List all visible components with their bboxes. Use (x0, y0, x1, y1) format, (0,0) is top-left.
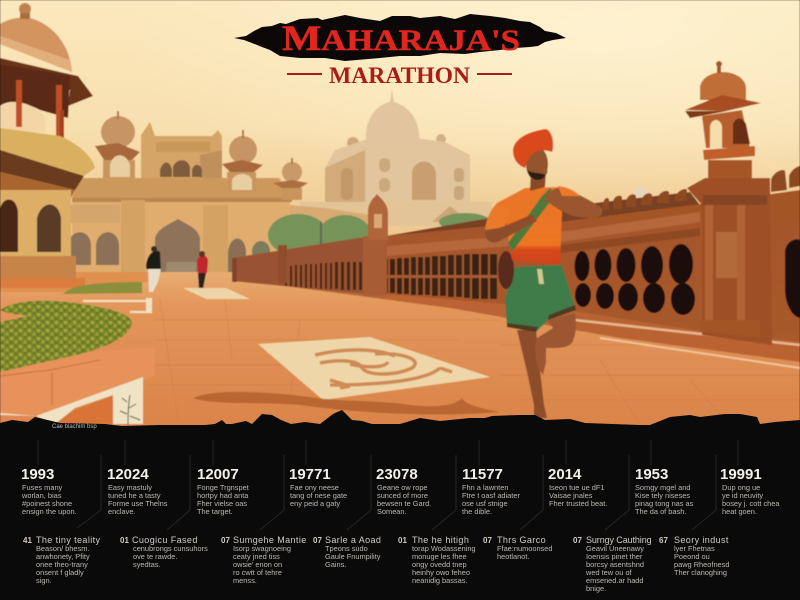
item 8: pawg Rheofnesd (674, 560, 729, 569)
ground paving (0, 272, 800, 427)
item 2: cenubrongs cunsuhors (133, 544, 208, 553)
ground swirl mosaic (258, 337, 490, 400)
entry 12007 (197, 466, 249, 516)
small openings far section (383, 254, 497, 299)
crenellated top (386, 166, 800, 242)
entry 2014: Iseon tue ue dF1 (549, 483, 604, 492)
item 4: Gaule Fnumpility (325, 552, 381, 561)
pilasters (121, 200, 228, 275)
entry 19771 (289, 466, 347, 508)
small tower on wall (368, 194, 388, 240)
entry 12024: enclave. (108, 507, 136, 516)
weed plant (120, 395, 140, 425)
entry 11577: Fhn a lawnten (462, 483, 508, 492)
connector lines (38, 440, 738, 530)
sky (0, 0, 800, 290)
item 5: heinhy owo feheo (412, 568, 470, 577)
back tower block (141, 122, 222, 180)
timeline lower row (23, 535, 729, 593)
small caption: Cae blachim bsp (52, 424, 97, 430)
columns (16, 80, 22, 127)
entry 23078: sunced of more (377, 491, 428, 500)
turban (513, 129, 553, 168)
entry 2014: 2014 (548, 466, 582, 483)
entry 19991: ye id neuvity (722, 491, 763, 500)
entry 12007: Fher vielse oas (197, 499, 247, 508)
title banner (234, 14, 566, 88)
item 1: Beason/ bhesm. (36, 544, 89, 553)
item 1: onsent f gladly (36, 568, 84, 577)
balcony (0, 128, 95, 176)
trees in front of the palace (268, 213, 491, 256)
item 3: ro cwtt of tehre (233, 568, 282, 577)
item 8 (659, 535, 729, 577)
item 3: ceaty jned tiss (233, 552, 280, 561)
left arm (485, 203, 510, 232)
item 1: onee theo-trany (36, 560, 88, 569)
entry 11577: the dible. (462, 507, 492, 516)
gate arch (155, 219, 200, 278)
distant Taj Mahal style palace (300, 90, 650, 226)
entry 12007: The target. (197, 507, 233, 516)
green hedge and lawn (0, 282, 142, 372)
entry 11577: Ftre t oasf adiater (462, 491, 520, 500)
background scene (0, 0, 800, 427)
item 5: The he hitigh (412, 535, 469, 545)
pillars (232, 258, 237, 282)
item 2: 01 (120, 536, 129, 545)
wall section near (232, 237, 365, 294)
entry 23078: Somean. (377, 507, 407, 516)
item 7: 07 (573, 536, 582, 545)
distant runners (146, 246, 208, 292)
item 5: neanidig bassas. (412, 576, 467, 585)
entry 1953: Somgy mgel and (635, 483, 690, 492)
right wall with balustrade (232, 166, 800, 345)
entry 1993: #poinest shone (22, 499, 72, 508)
item 8: 67 (659, 536, 668, 545)
plinth (0, 256, 76, 278)
item 3: menss. (233, 576, 257, 585)
item 2 (120, 535, 208, 569)
large openings (574, 239, 800, 318)
ground shadow (193, 392, 500, 414)
dome middle (229, 136, 257, 164)
entry 12024: 12024 (107, 466, 149, 483)
lamp post (320, 222, 322, 248)
subtitle rule right (477, 73, 512, 75)
entry 19991 (720, 466, 780, 516)
waist pouch (498, 251, 514, 289)
item 2: Cuogicu Fased (132, 535, 198, 545)
shorts (505, 265, 576, 332)
big pier (687, 178, 772, 345)
entry 1953: 1953 (635, 466, 668, 483)
entry 1953: pinag tong nas as (635, 499, 694, 508)
entry 19771: eny peid a gaty (290, 499, 340, 508)
item 6: heotlanot. (497, 552, 529, 561)
item 6 (483, 535, 552, 561)
entry 1953 (635, 466, 694, 516)
item 7: emsened.ar hadd (586, 576, 644, 585)
item 3: 07 (221, 536, 230, 545)
item 1: 41 (23, 536, 32, 545)
timeline text wrapper (21, 466, 780, 593)
item 8: lyer Fhetnas (674, 544, 715, 553)
entry 1953: Kise tely niseses (635, 491, 690, 500)
item 5: torap Wodassening (412, 544, 476, 553)
item 7: bnige. (586, 584, 606, 593)
canopy (0, 58, 93, 106)
entry 23078 (376, 466, 431, 516)
item 7: wed tew ou of (585, 568, 633, 577)
item 5: ongy ovedd tnep (412, 560, 467, 569)
item 2: ove te rawde. (133, 552, 177, 561)
right arm (544, 187, 602, 218)
title text: MAHARAJA'S (282, 18, 520, 58)
entry 1993 (21, 466, 77, 516)
item 3: owsie' enon on (233, 560, 282, 569)
entry 12007: Fonge Trgnspet (197, 483, 249, 492)
entry 12024: tuned he a tasty (108, 491, 161, 500)
main facade (72, 178, 290, 280)
item 4: 07 (313, 536, 322, 545)
entry 1953: The da of bash. (635, 507, 686, 516)
entry 19991: 19991 (720, 466, 762, 483)
entry 11577: ose usf stnige (462, 499, 508, 508)
entry 19991: bosey j. cott chea (722, 499, 780, 508)
entry 11577 (462, 466, 520, 516)
item 6: 07 (483, 536, 492, 545)
pale kerb line (575, 320, 800, 345)
left pavilion (0, 3, 95, 288)
entry 23078: 23078 (376, 466, 418, 483)
item 6: Thrs Garco (497, 535, 546, 545)
entry 12007: 12007 (197, 466, 239, 483)
item 1: sign. (36, 576, 52, 585)
brush stroke (234, 14, 566, 61)
neck and head (530, 170, 546, 191)
item 4: Sarle a Aoad (325, 535, 381, 545)
item 6: Ffae:numoonsed (497, 544, 552, 553)
item 1 (23, 535, 101, 585)
dome left (101, 116, 135, 148)
item 3 (221, 535, 307, 585)
entry 1993: ensign the upon. (22, 507, 77, 516)
entry 1993: Fuses many (22, 483, 63, 492)
entry 23078: bewsen te Gard. (377, 499, 431, 508)
lower drum (0, 190, 71, 258)
item 4 (313, 535, 381, 569)
dome right (282, 162, 302, 182)
item 5: 01 (398, 536, 407, 545)
item 7: borcsy asentshnd (586, 560, 644, 569)
entry 12024: Forme use Thelns (108, 499, 168, 508)
entry 23078: Geane ow rope (377, 483, 428, 492)
main runner (485, 129, 602, 418)
entry 19991: Dup ong ue (722, 483, 760, 492)
entry 1993: worlan, bias (21, 491, 62, 500)
side arches (68, 232, 91, 265)
entry 19771: Fae ony neese (290, 483, 339, 492)
item 1: The tiny teality (36, 535, 101, 545)
item 4: Tpeons sudo (325, 544, 368, 553)
item 3: Sumgehe Mantie (233, 535, 307, 545)
entry 1993: 1993 (21, 466, 54, 483)
entry 19991: heat goen. (722, 507, 757, 516)
item 8: Ther clanoghing (674, 568, 727, 577)
item 8: Poeond ou (674, 552, 710, 561)
green sash (508, 188, 556, 252)
torso shirt (497, 187, 562, 265)
item 7: Ioensis pinet ther (586, 552, 643, 561)
subtitle: MARATHON (329, 63, 470, 88)
standing leg (517, 330, 547, 418)
entry 2014 (548, 466, 607, 508)
entry 12007: hortpy had anta (197, 491, 249, 500)
item 1: anwhonety, Pfity (36, 552, 90, 561)
entry 19771: 19771 (289, 466, 331, 483)
item 7 (573, 535, 652, 593)
item 3: Isorp swagnoeing (233, 544, 291, 553)
item 8: Seory indust (674, 535, 729, 545)
subtitle rule left (287, 73, 322, 75)
item 7: Surngy Cauthing (586, 535, 652, 545)
item 7: Geavil Uneenawy (586, 544, 644, 553)
item 5: monuge les fhee (412, 552, 467, 561)
lower left steps and white path (0, 288, 250, 424)
timeline upper row (21, 466, 780, 516)
entry 2014: Fher trusted beat. (549, 499, 607, 508)
bent leg (535, 313, 576, 375)
small openings near section (285, 262, 362, 290)
item 5 (398, 535, 476, 585)
entry 12024 (107, 466, 168, 516)
item 2: syedtas. (133, 560, 161, 569)
entry 11577: 11577 (462, 466, 503, 483)
dome (0, 18, 72, 72)
wall section far (386, 190, 800, 342)
central palace with domes and gate (68, 111, 370, 280)
entry 2014: Vaisae jnales (549, 491, 593, 500)
entry 19771: tang of nese gate (290, 491, 347, 500)
far white dome (632, 184, 650, 200)
item 4: Gains. (325, 560, 346, 569)
right chhatri tower (685, 61, 761, 178)
black silhouette footer band (0, 410, 800, 600)
entry 12024: Easy mastuly (108, 483, 152, 492)
shadow under wall (232, 279, 800, 362)
